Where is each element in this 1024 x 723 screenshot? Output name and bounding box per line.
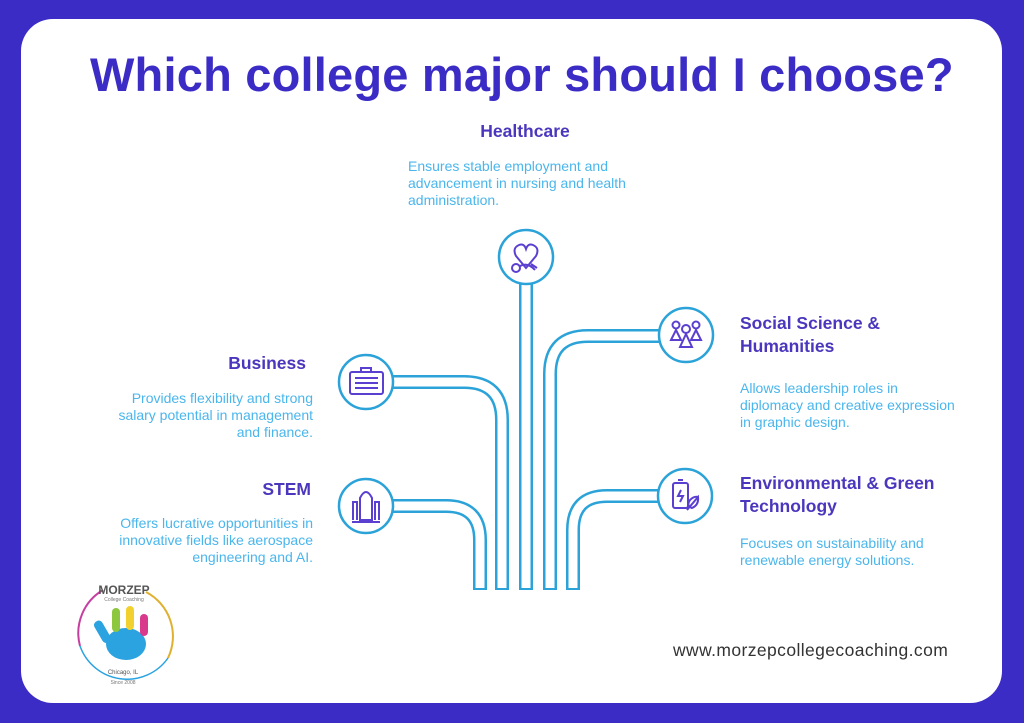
heading: Healthcare: Healthcare <box>480 121 570 141</box>
heading: Environmental: Environmental & Green <box>740 473 934 493</box>
text: social desc: diplomacy and creative expression <box>740 397 955 413</box>
text: healthcare desc: advancement in nursing and health <box>408 175 626 191</box>
icon: healthcare <box>499 230 553 284</box>
heading: Environmental <box>740 473 934 516</box>
heading: Environmental: Technology <box>740 496 837 516</box>
text: STEM desc: innovative fields like aerospace <box>119 532 313 548</box>
logo <box>77 583 174 686</box>
logo: Since 2008 <box>110 680 136 686</box>
logo: MORZEP <box>98 583 150 597</box>
heading: Business: Business <box>228 353 306 373</box>
title: Which college major should I choose? <box>90 48 954 101</box>
logo: College Coaching <box>104 597 144 603</box>
heading: Social Science: Social Science & <box>740 313 880 333</box>
footer url: www.morzepcollegecoaching.com <box>673 640 948 660</box>
text: healthcare desc <box>408 158 626 208</box>
icon: environment <box>658 469 712 523</box>
text: business desc: Provides flexibility and strong <box>132 390 313 406</box>
text: healthcare desc: Ensures stable employment and <box>408 158 608 174</box>
icon: social <box>659 308 713 362</box>
logo: Chicago, IL <box>108 670 139 676</box>
text: STEM desc <box>119 515 313 565</box>
text: business desc: salary potential in management <box>118 407 313 423</box>
text: STEM desc: Offers lucrative opportunities in <box>120 515 313 531</box>
text: social desc <box>740 380 955 430</box>
text: env desc: renewable energy solutions. <box>740 552 914 568</box>
text: social desc: Allows leadership roles in <box>740 380 898 396</box>
text: env desc: Focuses on sustainability and <box>740 535 924 551</box>
text: env desc <box>740 535 924 568</box>
icon: STEM <box>339 479 393 533</box>
heading: Social Science <box>740 313 880 356</box>
text: business desc: and finance. <box>237 424 313 440</box>
text: social desc: in graphic design. <box>740 414 850 430</box>
text: business desc <box>118 390 313 440</box>
text: STEM desc: engineering and AI. <box>192 549 313 565</box>
icon: business <box>339 355 393 409</box>
text: healthcare desc: administration. <box>408 192 499 208</box>
heading: Social Science: Humanities <box>740 336 834 356</box>
heading: STEM: STEM <box>262 479 311 499</box>
